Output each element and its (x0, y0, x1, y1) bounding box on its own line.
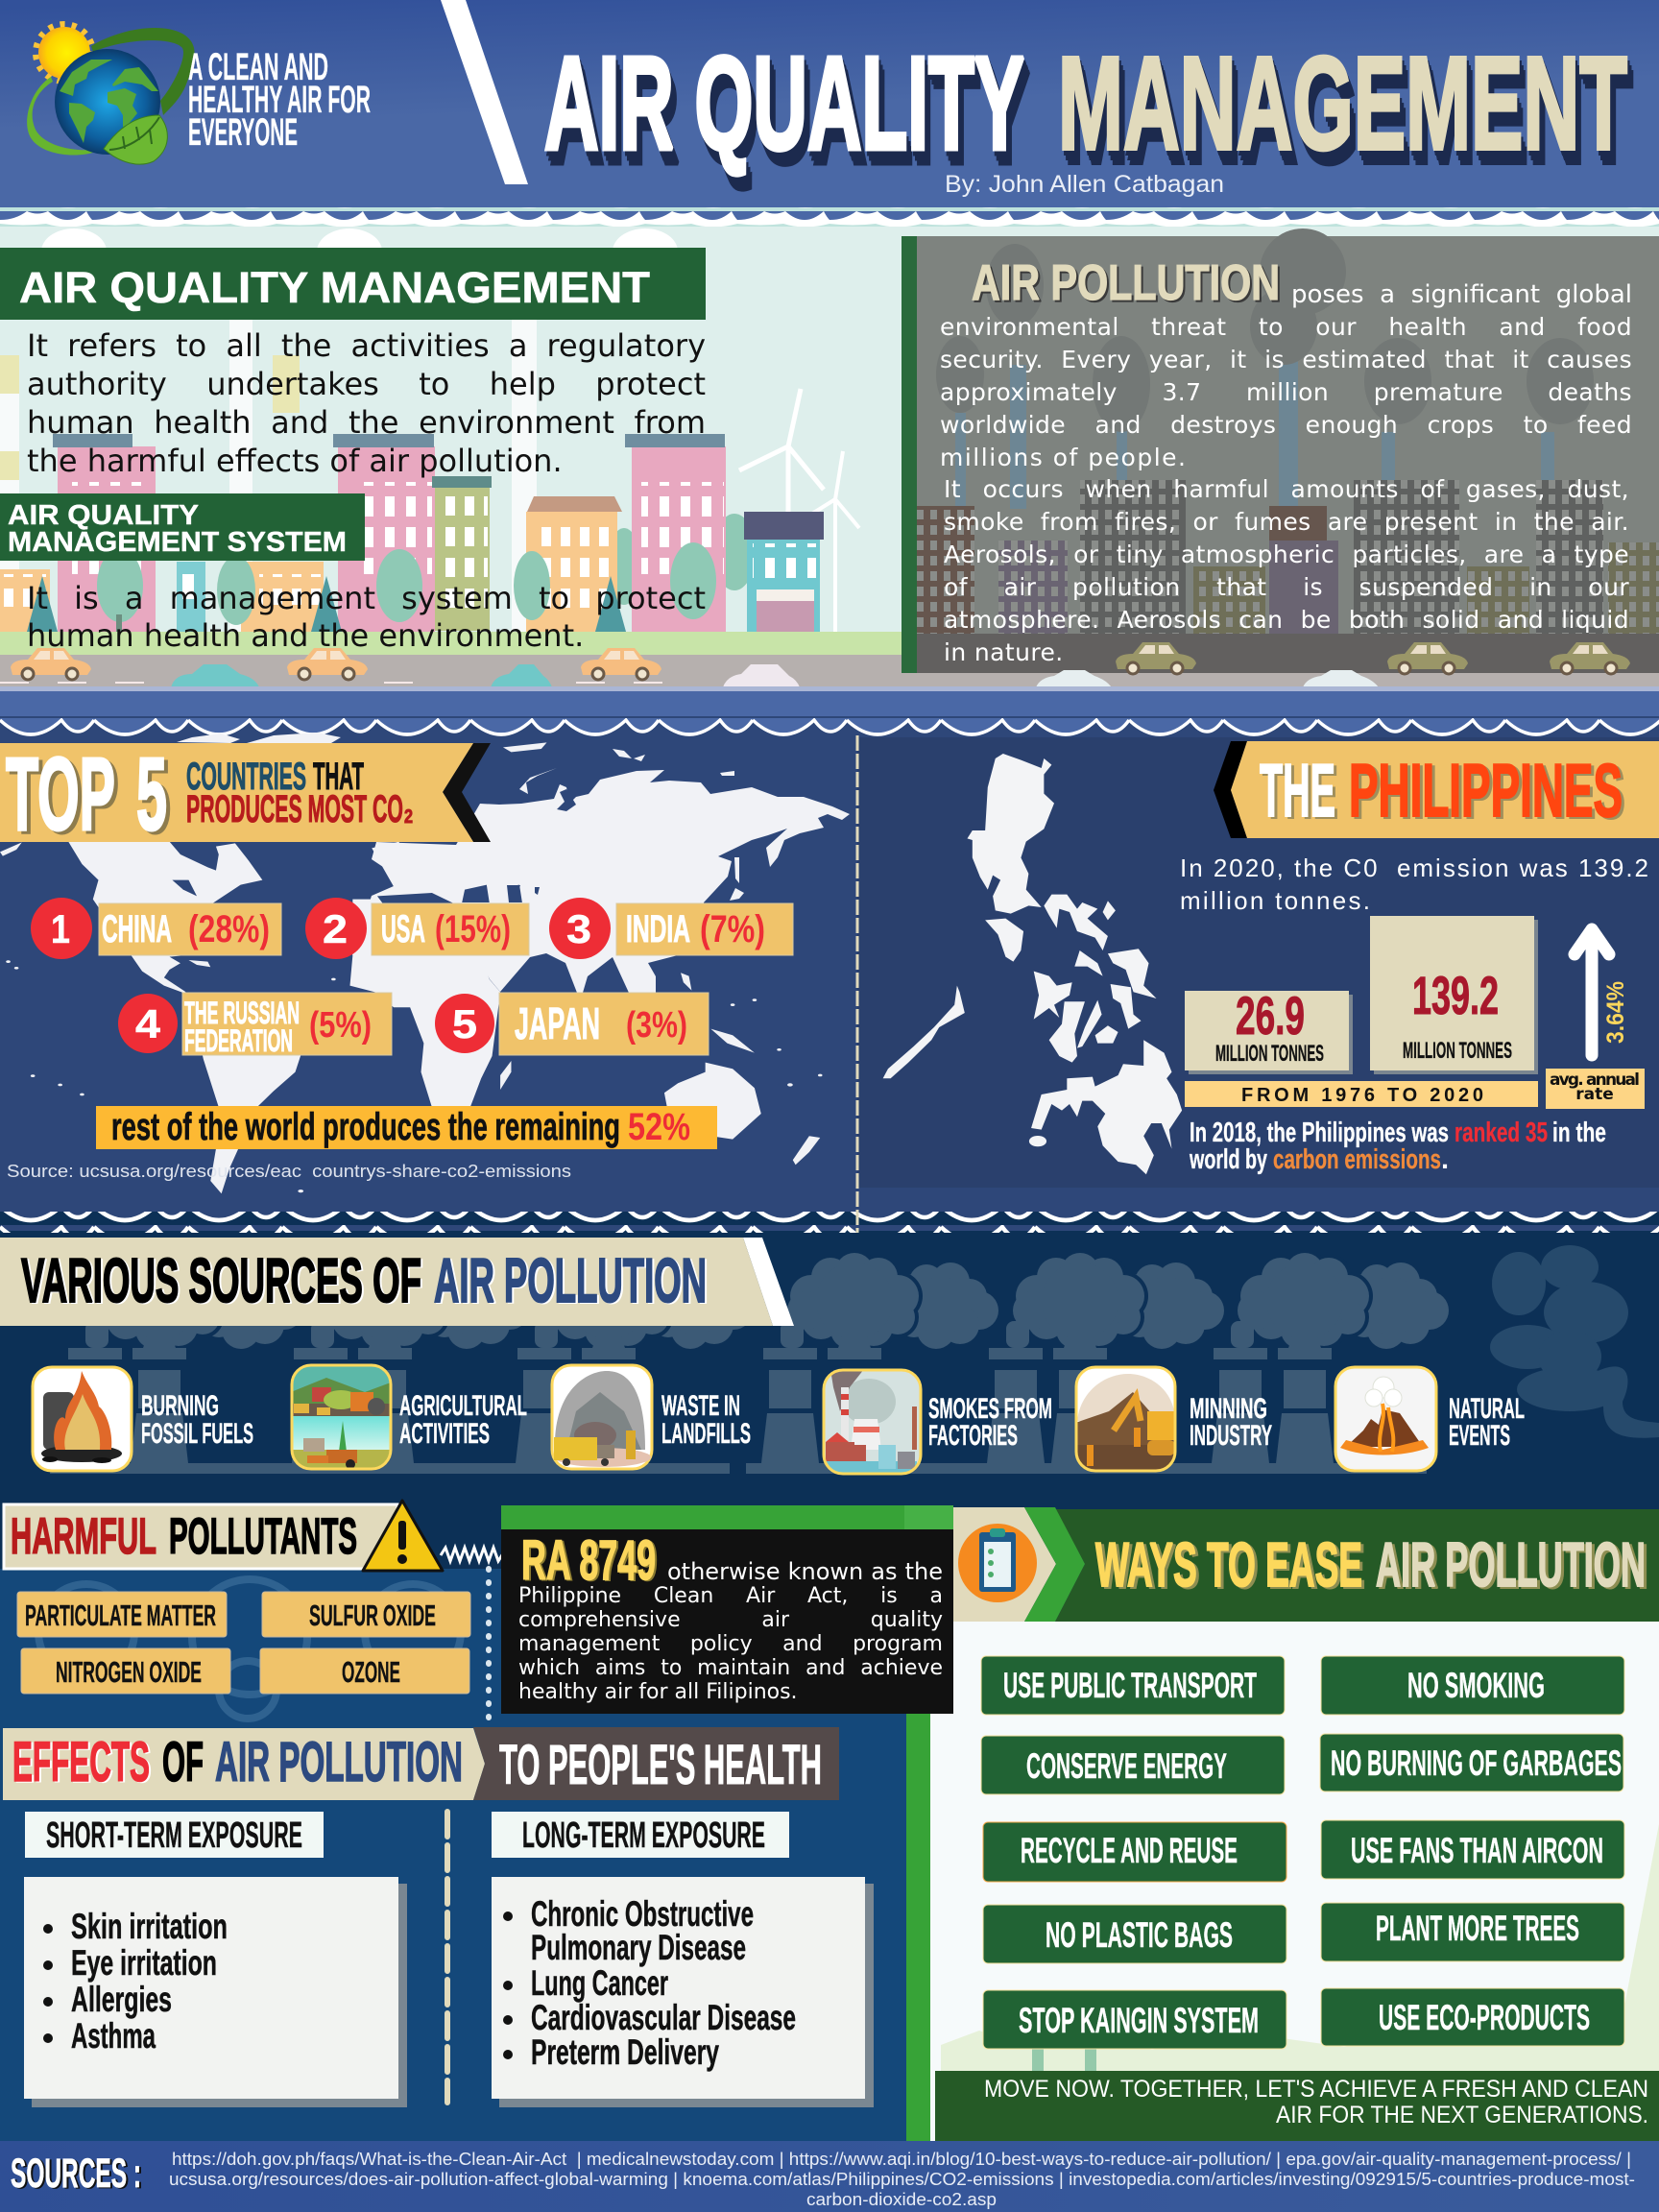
heading: harmful pollutants: POLLUTANTS (169, 1508, 357, 1565)
heading: effects of air pollution: EFFECTS (12, 1731, 150, 1793)
label: short-term exposure: SHORT-TERM EXPOSURE (46, 1815, 302, 1856)
header background (0, 0, 1659, 209)
text: air pollution body: millions of people. (940, 444, 1187, 471)
rank 5: japan (435, 993, 709, 1055)
button: no plastic bags: NO PLASTIC BAGS (1046, 1915, 1233, 1955)
text: air pollution body: security. Every year, it is estimated that it causes (940, 346, 1632, 373)
text: management system definition: It is a management system to protect (27, 580, 706, 616)
panel: left blue background (0, 1569, 906, 2142)
text: 2020 emission: In 2020, the C0 emission was 139.2 (1180, 854, 1648, 882)
icon: leaf (104, 115, 167, 164)
footer: sources (0, 2141, 1659, 2212)
heading: effects of air pollution: AIR POLLUTION (215, 1731, 463, 1793)
text: air pollution causes: in nature. (944, 638, 1064, 666)
rank 2: usa: 2 (323, 906, 348, 951)
wave above top five section (0, 716, 1659, 737)
card: short-term effects: Allergies (71, 1980, 172, 2019)
label: average annual rate: avg. annual (1550, 1070, 1640, 1090)
text: air quality management definition (27, 327, 706, 479)
rank 1: china: CHINA (102, 908, 172, 950)
bar: 2020 value: MILLION TONNES (1403, 1038, 1512, 1064)
pollutant: nitrogen oxide (21, 1648, 230, 1694)
header: ways to ease: WAYS TO EASE (1095, 1529, 1362, 1599)
bar: 1976 value (1185, 985, 1353, 1074)
band and dark section background (0, 686, 1659, 1599)
source: burning fossil fuels: FOSSIL FUELS (141, 1418, 253, 1450)
source: natural events: NATURAL (1449, 1393, 1525, 1425)
rank 1: china: 1 (51, 906, 70, 951)
icon: factory skyline (823, 1369, 921, 1474)
card: long-term effects: Cardiovascular Disease (531, 1998, 796, 2037)
text: ra 8749 body (518, 1584, 943, 1704)
rank 4: russian federation: FEDERATION (184, 1023, 293, 1058)
text: 2018 ranking: ranked 35 (1455, 1118, 1548, 1148)
text: air quality management definition: It refers to all the activities a regulatory (27, 327, 706, 364)
button: stop kaingin system (983, 1990, 1286, 2049)
card: long-term effects: Chronic Obstructive (531, 1894, 754, 1934)
callout: rest of the world: 52% (628, 1106, 690, 1148)
countries that heading (186, 756, 413, 830)
callout: move now (935, 2071, 1659, 2141)
pollutant: ozone (260, 1648, 469, 1694)
card: short-term effects (24, 1877, 407, 2107)
rank 2: usa (305, 898, 529, 959)
footer: sources: carbon-dioxide-co2.asp (806, 2190, 997, 2209)
heading: harmful pollutants (4, 1504, 397, 1569)
header to content wave (0, 207, 1659, 227)
icon: sun (36, 25, 92, 81)
text: management system definition: human health and the environment. (27, 617, 584, 654)
panel: ra 8749 (501, 1505, 953, 1714)
heading: effects of air pollution (3, 1728, 485, 1800)
arrow: growth (1575, 929, 1609, 1055)
button: recycle and reuse (983, 1822, 1286, 1882)
text: air pollution causes: It occurs when harmful amounts of gases, dust, (944, 475, 1629, 503)
text: 2018 ranking: carbon emissions (1273, 1144, 1441, 1175)
heading: air quality management system: AIR QUALITY (8, 500, 199, 531)
source: agricultural activities: AGRICULTURAL (399, 1390, 527, 1422)
top 5 heading: 5 (136, 735, 167, 852)
button: use public transport (981, 1656, 1285, 1715)
text: 2020 emission: million tonnes. (1180, 886, 1370, 915)
footer: sources: SOURCES : (11, 2151, 141, 2197)
divider: dashed vertical (856, 735, 858, 1233)
button: plant more trees (1321, 1903, 1624, 1961)
countries that heading: 2 (404, 806, 413, 828)
source: agricultural activities: ACTIVITIES (399, 1418, 490, 1450)
philippines map (883, 754, 1182, 1174)
button: no burning of garbages (1320, 1734, 1623, 1791)
source: waste in landfills: LANDFILLS (661, 1418, 751, 1450)
banner: the philippines (1214, 741, 1659, 838)
logo tagline: A CLEAN AND (188, 46, 328, 88)
heading: harmful pollutants: HARMFUL (11, 1508, 156, 1565)
button: conserve energy: CONSERVE ENERGY (1026, 1746, 1227, 1786)
top 5 heading: TOP (6, 735, 115, 852)
source: mining industry (1075, 1366, 1272, 1472)
heading: air pollution: AIR POLLUTION (972, 255, 1280, 311)
card: short-term effects: Asthma (71, 2016, 156, 2056)
source: waste in landfills (552, 1365, 751, 1469)
logo tagline: HEALTHY AIR FOR (188, 79, 371, 121)
text: 2018 ranking: In 2018, the Philippines was (1190, 1118, 1449, 1148)
banner: top 5 countries (0, 735, 491, 852)
heading: effects of air pollution: OF (162, 1731, 204, 1793)
text: air pollution intro: poses a significant global (1291, 280, 1632, 309)
pollutant: particulate matter: PARTICULATE MATTER (25, 1599, 216, 1632)
byline: By: John Allen Catbagan (945, 171, 1224, 198)
label: average annual rate (1546, 1069, 1645, 1109)
icon: clipboard (958, 1524, 1037, 1602)
logo tagline: EVERYONE (188, 111, 298, 154)
text: 2018 ranking: world by (1189, 1144, 1267, 1175)
dotted divider (486, 1569, 492, 1719)
card: short-term effects: Eye irritation (71, 1943, 217, 1983)
source: agricultural activities (291, 1364, 527, 1469)
text: air pollution causes (944, 475, 1629, 666)
source: natural events (1335, 1367, 1525, 1471)
text: air quality management definition: authority undertakes to help protect (27, 366, 706, 402)
rank 3: india: INDIA (626, 908, 690, 950)
pollutant: ozone: OZONE (342, 1655, 400, 1689)
bar: 1976 value: 26.9 (1236, 985, 1305, 1046)
pollutant: nitrogen oxide: NITROGEN OXIDE (56, 1655, 202, 1689)
card: long-term effects: Lung Cancer (531, 1963, 668, 2003)
label: long-term exposure: LONG-TERM EXPOSURE (522, 1815, 765, 1856)
rank 3: india: 3 (566, 906, 591, 951)
source: waste in landfills: WASTE IN (661, 1390, 740, 1422)
pollutant: sulfur oxide (262, 1592, 470, 1637)
wave below top five section (0, 1212, 1659, 1233)
rank 5: japan: (3%) (626, 1005, 687, 1046)
countries that heading: COUNTRIES (186, 756, 306, 798)
button: no plastic bags (983, 1905, 1286, 1963)
button: recycle and reuse: RECYCLE AND REUSE (1021, 1831, 1238, 1870)
panel: right ways background (906, 1622, 1659, 2141)
text: air pollution body (940, 313, 1632, 471)
icon: farm scenes (291, 1364, 391, 1469)
rank 1: china (31, 898, 281, 959)
icon: globe (55, 49, 160, 155)
icon: landfill (552, 1365, 652, 1469)
label: from 1976 to 2020 (1185, 1081, 1538, 1107)
countries that heading: PRODUCES MOST CO (186, 788, 403, 830)
rank 2: usa: USA (381, 908, 425, 950)
rank 3: india (549, 898, 793, 959)
card: long-term effects: Pulmonary Disease (531, 1928, 746, 1967)
header: ways to ease (953, 1507, 1659, 1622)
text: air pollution causes: smoke from fires, or fumes are present in the air. (944, 508, 1629, 536)
button: use public transport: USE PUBLIC TRANSPORT (1003, 1666, 1257, 1705)
text: air pollution body: approximately 3.7 million premature deaths (940, 378, 1632, 406)
world map (177, 733, 850, 993)
panel: ra 8749: RA 8749 (521, 1529, 656, 1592)
card: short-term effects: Skin irritation (71, 1907, 228, 1946)
callout: rest of the world: rest of the world produces the remaining (111, 1106, 620, 1148)
text: 2018 ranking (1189, 1118, 1606, 1175)
rank 2: usa: (15%) (435, 908, 511, 950)
card: long-term effects: Preterm Delivery (531, 2032, 719, 2072)
button: no smoking (1321, 1656, 1624, 1715)
icon: excavator (1075, 1366, 1175, 1472)
text: ra 8749 body: management policy and program (518, 1632, 943, 1656)
label: average annual rate: rate (1575, 1085, 1614, 1104)
button: conserve energy (981, 1736, 1285, 1794)
text: ra 8749 body: which aims to maintain and achieve (518, 1656, 943, 1680)
text: air quality management definition: human health and the environment from (27, 404, 706, 441)
title: AIR QUALITY (544, 30, 1024, 178)
countries that heading: THAT (313, 756, 364, 798)
text: ra 8749 intro: otherwise known as the (667, 1558, 943, 1585)
icon: warning triangle (363, 1501, 443, 1571)
zigzag connector (441, 1548, 503, 1561)
heading: air quality management system (0, 493, 365, 561)
text: air pollution causes: Aerosols, or tiny atmospheric particles, are a type (944, 541, 1629, 568)
big smoke cloud (1490, 1245, 1659, 1438)
rank 5: japan: 5 (452, 1001, 477, 1046)
bar: 2020 value: 139.2 (1412, 965, 1499, 1025)
factory silhouettes background (50, 1253, 1449, 1474)
rank 4: russian federation: THE RUSSIAN (184, 996, 300, 1030)
section background: air quality management scene (0, 223, 1659, 687)
bar: 2020 value (1370, 916, 1538, 1074)
source: smokes from factories (823, 1369, 1052, 1474)
source: mining industry: MINNING (1190, 1393, 1267, 1425)
label: 3.64 percent: 3.64% (1602, 981, 1629, 1044)
text: management system definition (27, 580, 706, 654)
rank 4: russian federation: 4 (135, 1001, 161, 1046)
rank 3: india: (7%) (700, 908, 765, 950)
button: use eco-products (1321, 1988, 1624, 2046)
logo (27, 25, 195, 164)
rank 4: russian federation (118, 993, 392, 1058)
heading: air quality management system: MANAGEMENT SYSTEM (8, 527, 347, 558)
source: burning fossil fuels: BURNING (141, 1390, 219, 1422)
label: short-term exposure (25, 1812, 324, 1858)
button: use fans than aircon (1321, 1820, 1624, 1879)
footer: sources: ucsusa.org/resources/does-air-pollution-affect-global-warming | knoema.com/atlas/Philippines/CO2-emissions | investopedia.com/articles/investing/092915/5-countries-produce-most- (169, 2170, 1635, 2189)
text: air pollution body: worldwide and destroys enough crops to feed (940, 411, 1632, 439)
text: ra 8749 body: Philippine Clean Air Act, is a (518, 1584, 943, 1608)
wind turbines (739, 389, 859, 634)
banner: various sources: AIR POLLUTION (434, 1245, 707, 1315)
heading: air quality management (0, 248, 706, 320)
heading: to people's health: TO PEOPLE'S HEALTH (499, 1734, 822, 1796)
pollutant: particulate matter (17, 1592, 227, 1637)
banner: various sources: VARIOUS SOURCES OF (21, 1245, 421, 1315)
pollutant: sulfur oxide: SULFUR OXIDE (309, 1599, 436, 1632)
panel: air pollution background (902, 228, 1659, 687)
source: smokes from factories: FACTORIES (928, 1420, 1018, 1452)
text: air pollution causes: atmosphere. Aerosols can be both solid and liquid (944, 606, 1629, 634)
button: stop kaingin system: STOP KAINGIN SYSTEM (1019, 2001, 1259, 2040)
heading: air quality management: AIR QUALITY MANAGEMENT (19, 263, 650, 312)
icon: burning barrel (33, 1367, 132, 1471)
banner: the philippines: THE (1260, 748, 1335, 832)
rank 1: china: (28%) (188, 908, 270, 950)
ring: green swoosh (27, 28, 195, 156)
city illustration (0, 389, 1659, 687)
divider: exposure columns (445, 1812, 450, 2103)
text: ra 8749 body: comprehensive air quality (518, 1608, 943, 1632)
bar: 1976 value: MILLION TONNES (1215, 1041, 1324, 1067)
slash divider (441, 0, 528, 184)
label: long-term exposure (492, 1812, 789, 1858)
source: smokes from factories: SMOKES FROM (928, 1393, 1052, 1425)
button: no smoking: NO SMOKING (1407, 1666, 1545, 1705)
text: 2018 ranking: in the (1552, 1118, 1606, 1148)
source note: Source: ucsusa.org/resources/eac countrys-share-co2-emissions (7, 1162, 571, 1181)
footer: sources: https://doh.gov.ph/faqs/What-is-the-Clean-Air-Act | medicalnewstoday.com | https://www.aqi.in/blog/10-best-ways-to-reduce-air-pollution/ | epa.gov/air-quality-management-process/ | (172, 2150, 1631, 2169)
label: from 1976 to 2020: FROM 1976 TO 2020 (1241, 1085, 1483, 1106)
text: ra 8749 body: healthy air for all Filipinos. (518, 1680, 798, 1704)
text: air pollution causes: of air pollution that is suspended in our (944, 573, 1629, 601)
text: air pollution body: environmental threat to our health and food (940, 313, 1632, 341)
text: 2018 ranking: . (1441, 1144, 1449, 1175)
logo tagline (188, 46, 371, 154)
source: mining industry: INDUSTRY (1190, 1420, 1272, 1452)
rank 4: russian federation: (5%) (309, 1005, 372, 1046)
text: 2020 emission (1180, 854, 1648, 915)
source: natural events: EVENTS (1449, 1420, 1510, 1452)
card: long-term effects (492, 1877, 874, 2107)
heading: to people's health (473, 1727, 839, 1800)
source: burning fossil fuels (33, 1367, 253, 1471)
text: air quality management definition: the harmful effects of air pollution. (27, 443, 563, 479)
icon: volcano (1335, 1367, 1436, 1471)
rank 5: japan: JAPAN (515, 998, 600, 1048)
